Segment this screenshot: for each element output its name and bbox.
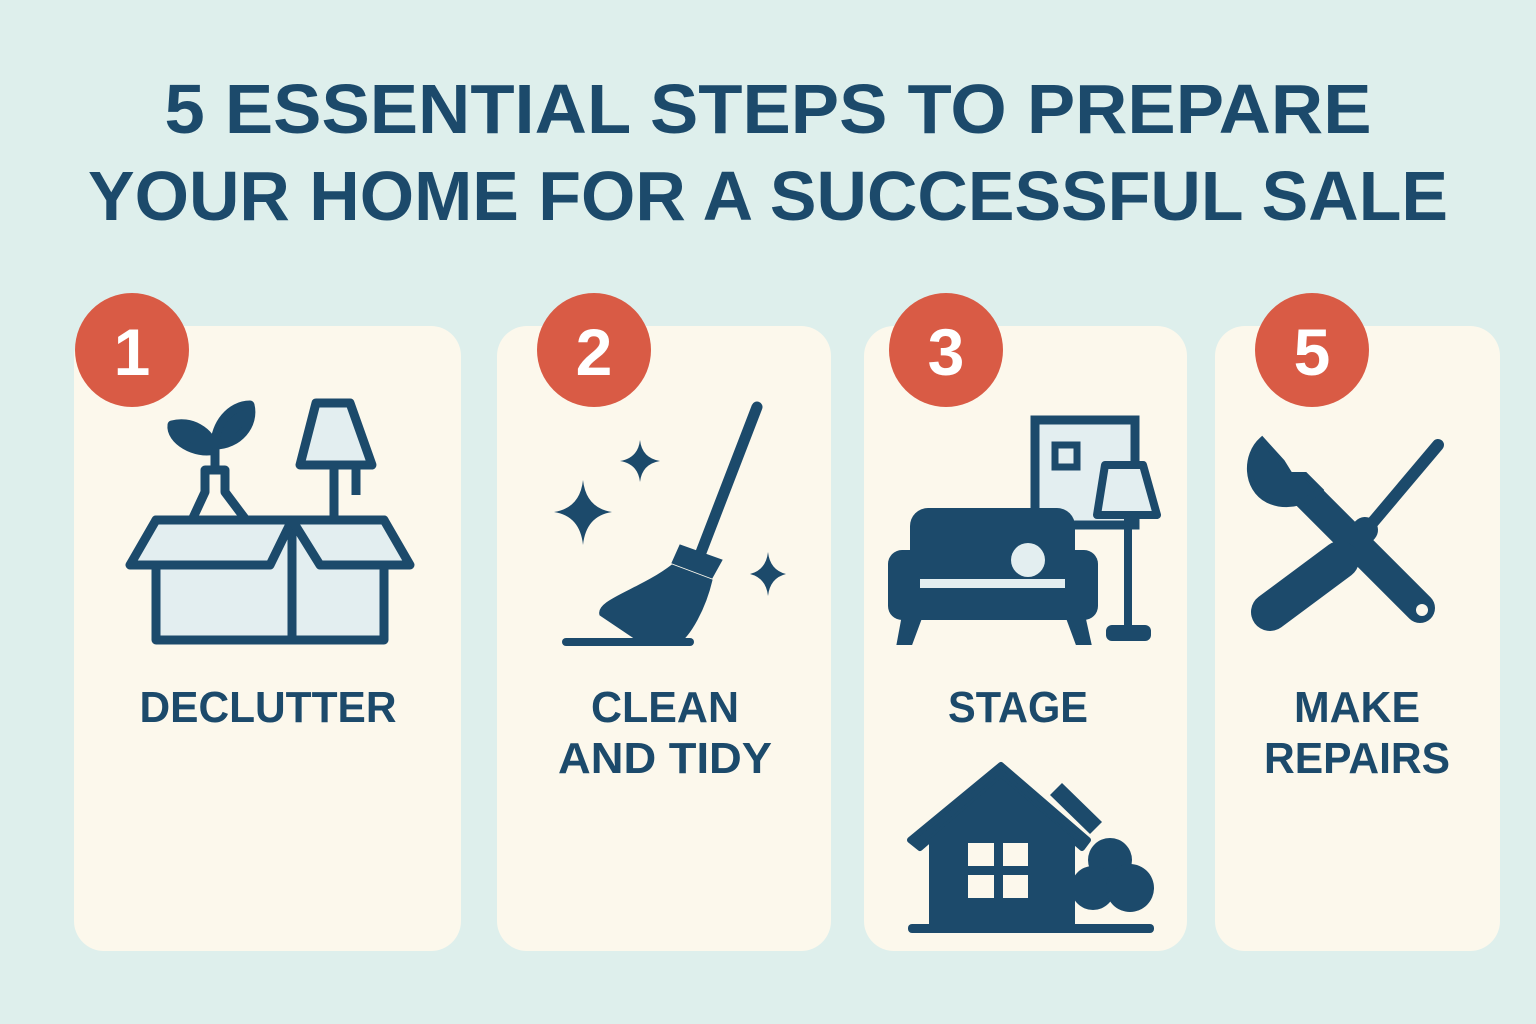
label: clean and tidy: CLEAN xyxy=(591,683,739,732)
icon: sofa, picture and lamp xyxy=(888,420,1157,642)
label: clean and tidy: AND TIDY xyxy=(558,734,772,783)
label: make repairs: REPAIRS xyxy=(1264,734,1450,783)
badge 3: 3 xyxy=(928,315,964,389)
badge 2 xyxy=(537,293,651,407)
panel: declutter xyxy=(74,293,461,951)
panel: make repairs xyxy=(1215,293,1500,951)
label: make repairs: MAKE xyxy=(1294,683,1420,732)
label: declutter: DECLUTTER xyxy=(140,683,396,732)
icon: house with tree xyxy=(908,765,1154,933)
icon: wrench and screwdriver xyxy=(1250,440,1438,616)
icon: box with plant and lamp xyxy=(130,403,410,640)
panel: stage xyxy=(864,293,1187,951)
label: clean and tidy xyxy=(558,683,772,783)
title: YOUR HOME FOR A SUCCESSFUL SALE xyxy=(88,157,1448,235)
label: stage: STAGE xyxy=(948,683,1088,732)
panel: clean and tidy xyxy=(497,293,831,951)
badge 1: 1 xyxy=(114,315,150,389)
badge 5: 5 xyxy=(1294,315,1330,389)
label: make repairs xyxy=(1264,683,1450,783)
badge 5 xyxy=(1255,293,1369,407)
title: 5 ESSENTIAL STEPS TO PREPARE xyxy=(164,70,1372,148)
badge 1 xyxy=(75,293,189,407)
badge 3 xyxy=(889,293,1003,407)
badge 2: 2 xyxy=(576,315,612,389)
icon: broom and sparkles xyxy=(554,407,786,642)
title xyxy=(88,70,1448,235)
